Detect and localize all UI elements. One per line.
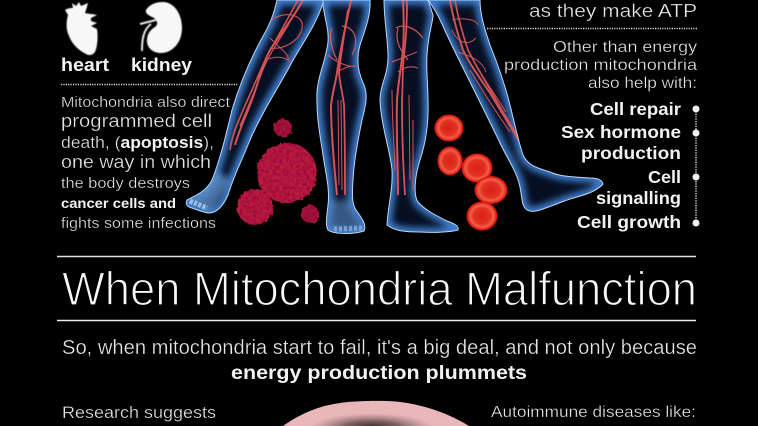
list: mitochondria functions: Cell — [648, 167, 681, 187]
text: apoptosis paragraph: cancer cells and — [61, 195, 176, 211]
text: other than energy: production mitochondria — [504, 57, 697, 74]
text: research suggests: Research suggests — [62, 403, 216, 422]
dotted divider right — [487, 28, 697, 30]
text: apoptosis paragraph: one way in which — [61, 152, 211, 172]
text: intro sentence: So, when mitochondria start to fail, it's a big deal, and not only because — [62, 337, 697, 359]
text: apoptosis paragraph — [61, 95, 230, 232]
top rule — [57, 256, 696, 258]
list: mitochondria functions: Sex hormone — [561, 122, 681, 142]
bottom rule — [57, 320, 696, 322]
list: mitochondria functions — [561, 99, 681, 232]
text: as they make ATP: as they make ATP — [529, 0, 697, 21]
label: kidney: kidney — [131, 55, 192, 75]
text: apoptosis paragraph: the body destroys — [61, 175, 190, 192]
text: apoptosis paragraph: fights some infections — [61, 216, 216, 232]
list: mitochondria functions: Cell growth — [577, 212, 681, 232]
dotted divider left — [61, 84, 238, 86]
text: energy production plummets: energy production plummets — [231, 362, 527, 384]
list: mitochondria functions: signalling — [596, 188, 681, 208]
text: other than energy: also help with: — [588, 75, 697, 92]
icon: kidney — [140, 2, 182, 53]
legs illustration — [186, 0, 603, 234]
icon: heart — [65, 2, 98, 55]
leg 4 — [428, 0, 603, 211]
text: other than energy: Other than energy — [553, 39, 697, 56]
leg 1 — [186, 0, 323, 213]
brain — [283, 401, 469, 426]
label: heart: heart — [61, 55, 109, 75]
text: other than energy — [504, 39, 697, 92]
cancer cells — [237, 115, 325, 227]
list connector dots — [692, 106, 700, 226]
text: apoptosis paragraph: programmed cell — [61, 111, 212, 131]
text: autoimmune diseases: Autoimmune diseases like: — [491, 404, 696, 421]
red blood cells — [434, 114, 508, 230]
list: mitochondria functions: production — [581, 143, 681, 163]
title: When Mitochondria Malfunction — [62, 262, 697, 315]
text: apoptosis paragraph: death, (apoptosis ), — [61, 134, 214, 152]
list: mitochondria functions: Cell repair — [590, 99, 681, 119]
text: apoptosis paragraph: Mitochondria also direct — [61, 95, 230, 111]
leg 2 — [317, 0, 370, 234]
leg 3 — [380, 0, 458, 232]
